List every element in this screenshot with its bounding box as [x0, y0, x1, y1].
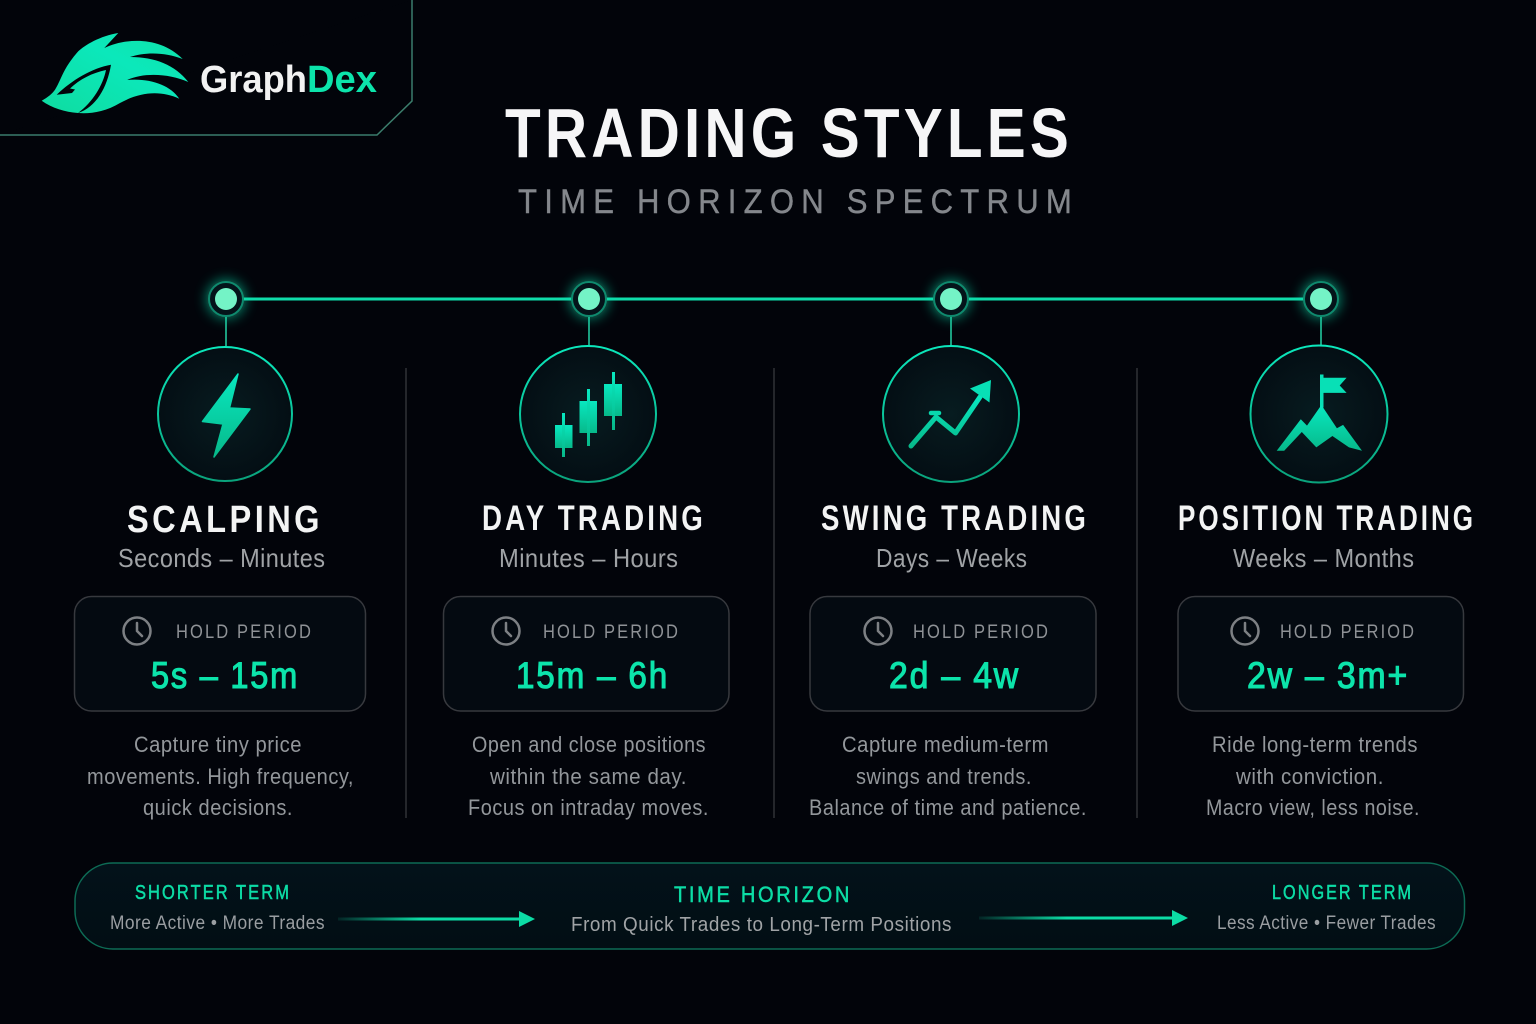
hold period label: HOLD PERIOD [1280, 621, 1416, 643]
time horizon heading: TIME HORIZON [674, 882, 852, 907]
arrow: right [979, 910, 1188, 926]
panel: scalping [74, 347, 366, 820]
hold period card [74, 596, 366, 711]
icon: candlesticks [520, 346, 656, 482]
description: Focus on intraday moves. [468, 795, 709, 820]
icon: clock [492, 618, 520, 644]
panel: day trading [444, 346, 729, 820]
description: within the same day. [489, 764, 687, 789]
hold period value: 15m – 6h [516, 655, 669, 696]
description: Ride long-term trends [1212, 732, 1418, 757]
description: Macro view, less noise. [1206, 795, 1420, 820]
description: Capture tiny price [134, 732, 302, 757]
logo wordmark: Graph [200, 59, 307, 101]
arrow: left [338, 911, 535, 927]
shorter term label: SHORTER TERM [135, 882, 291, 904]
longer term note: Less Active • Fewer Trades [1217, 913, 1436, 934]
hold period label: HOLD PERIOD [913, 621, 1050, 643]
time range: Seconds – Minutes [118, 543, 326, 573]
hold period label: HOLD PERIOD [176, 621, 313, 643]
icon: clock [1232, 618, 1258, 644]
time range: Days – Weeks [876, 543, 1028, 573]
hold period value: 2w – 3m+ [1247, 655, 1409, 696]
description [87, 732, 354, 820]
description [809, 732, 1087, 820]
time horizon note: From Quick Trades to Long-Term Positions [571, 914, 952, 936]
hold period value: 2d – 4w [889, 655, 1020, 696]
description: quick decisions. [143, 795, 293, 820]
heading: swing trading: SWING TRADING [821, 499, 1089, 538]
description [1206, 732, 1420, 820]
panel: position trading [1178, 346, 1476, 820]
timeline [206, 279, 1341, 346]
longer term label: LONGER TERM [1272, 882, 1413, 904]
time range: Weeks – Months [1233, 543, 1414, 573]
icon: clock [124, 618, 150, 644]
icon: GraphDex dragon logo [42, 33, 188, 113]
icon: lightning bolt [158, 347, 292, 481]
timeline node 3 [931, 279, 971, 319]
hold period card [810, 596, 1096, 711]
icon: rising arrow [883, 346, 1019, 482]
logo wordmark: Dex [307, 59, 377, 101]
timeline node 2 [569, 279, 609, 319]
description: swings and trends. [856, 764, 1032, 789]
subtitle: TIME HORIZON SPECTRUM [518, 183, 1079, 221]
hold period label: HOLD PERIOD [543, 621, 680, 643]
timeline node 4 [1301, 279, 1341, 319]
logo wordmark [200, 59, 377, 101]
hold period value: 5s – 15m [151, 655, 299, 696]
icon: clock [864, 618, 892, 644]
logo panel [0, 0, 412, 135]
icon: mountain with flag [1250, 346, 1388, 482]
description: movements. High frequency, [87, 764, 354, 789]
title: TRADING STYLES [505, 94, 1073, 172]
description [468, 732, 709, 820]
hold period card [444, 596, 729, 711]
description: Open and close positions [472, 732, 706, 757]
timeline node 1 [206, 279, 246, 319]
heading: day trading: DAY TRADING [482, 499, 706, 538]
panel: time horizon bar [75, 863, 1464, 949]
description: Balance of time and patience. [809, 795, 1087, 820]
panel: swing trading [809, 346, 1096, 820]
description: Capture medium-term [842, 732, 1049, 757]
description: with conviction. [1235, 764, 1384, 789]
time range: Minutes – Hours [499, 543, 678, 573]
hold period card [1178, 596, 1464, 711]
shorter term note: More Active • More Trades [110, 913, 325, 934]
heading: scalping: SCALPING [127, 499, 323, 541]
